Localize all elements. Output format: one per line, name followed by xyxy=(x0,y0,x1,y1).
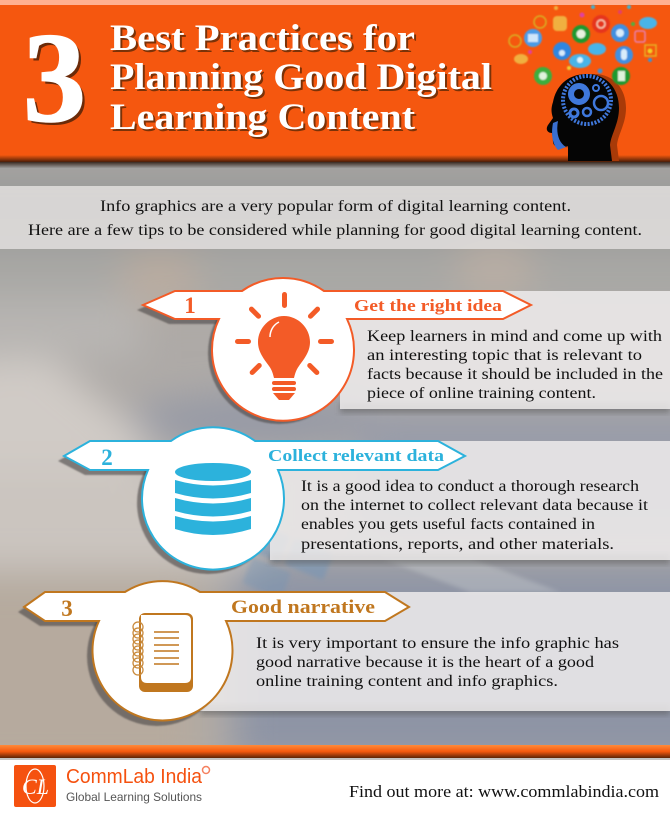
panel: tip 1: Get the right idea xyxy=(354,296,503,315)
panel: tip 3: 3 xyxy=(61,596,73,621)
logo: CommLab India: CommLab India xyxy=(66,766,203,788)
icon: notebook xyxy=(133,613,193,692)
panel: tip 3: online training content and info graphics. xyxy=(256,673,558,690)
panel: tip 3 xyxy=(18,581,670,726)
keyboard keys xyxy=(244,542,330,591)
panel: tip 2: enables you gets useful facts contained in xyxy=(301,516,595,533)
panel: tip 2: It is a good idea to conduct a thorough research xyxy=(301,478,639,495)
title xyxy=(110,18,494,140)
header band xyxy=(0,0,670,168)
panel: tip 1: Keep learners in mind and come up with xyxy=(367,328,662,345)
laptop edge highlight xyxy=(395,560,554,592)
panel: tip 2: Collect relevant data xyxy=(268,446,445,465)
icon: head with app icons xyxy=(509,5,657,161)
panel: tip 1: 1 xyxy=(184,293,196,318)
panel: tip 3: good narrative because it is the heart of a good xyxy=(256,654,594,671)
panel: tip 3: It is very important to ensure the info graphic has xyxy=(256,635,619,652)
panel: tip 1: facts because it should be included in the xyxy=(367,366,663,383)
panel: tip 2: on the internet to collect relevant data because it xyxy=(301,497,649,514)
panel: tip 2 xyxy=(58,427,670,574)
logo: CommLab India: CL xyxy=(22,774,49,799)
logo: CommLab India: Global Learning Solutions xyxy=(66,790,202,804)
title: Best Practices for xyxy=(110,18,415,59)
footer band xyxy=(0,745,670,760)
title: Learning Content xyxy=(110,97,416,138)
intro band: Info graphics are a very popular form of digital learning content. xyxy=(100,198,571,215)
logo: CommLab India xyxy=(14,765,210,807)
panel: tip 3: Good narrative xyxy=(231,597,375,618)
title: Planning Good Digital xyxy=(112,59,494,100)
intro band xyxy=(0,186,670,249)
big number 3: 3 xyxy=(26,10,89,152)
big number 3: 3 xyxy=(23,7,86,149)
panel: tip 1: piece of online training content. xyxy=(367,385,596,402)
title: Best Practices for xyxy=(112,20,417,61)
panel: tip 2: 2 xyxy=(101,445,113,470)
title: Planning Good Digital xyxy=(110,57,492,98)
icon: database xyxy=(175,463,251,535)
title: Learning Content xyxy=(112,99,418,140)
background photo xyxy=(0,168,670,745)
icon: light bulb xyxy=(235,292,334,400)
panel: tip 2: presentations, reports, and other materials. xyxy=(301,536,614,553)
intro band: Here are a few tips to be considered while planning for good digital learning content. xyxy=(28,222,642,239)
footer link text: Find out more at: www.commlabindia.com xyxy=(349,782,659,801)
panel: tip 1: an interesting topic that is relevant to xyxy=(367,347,642,364)
panel: tip 1 xyxy=(137,278,670,424)
